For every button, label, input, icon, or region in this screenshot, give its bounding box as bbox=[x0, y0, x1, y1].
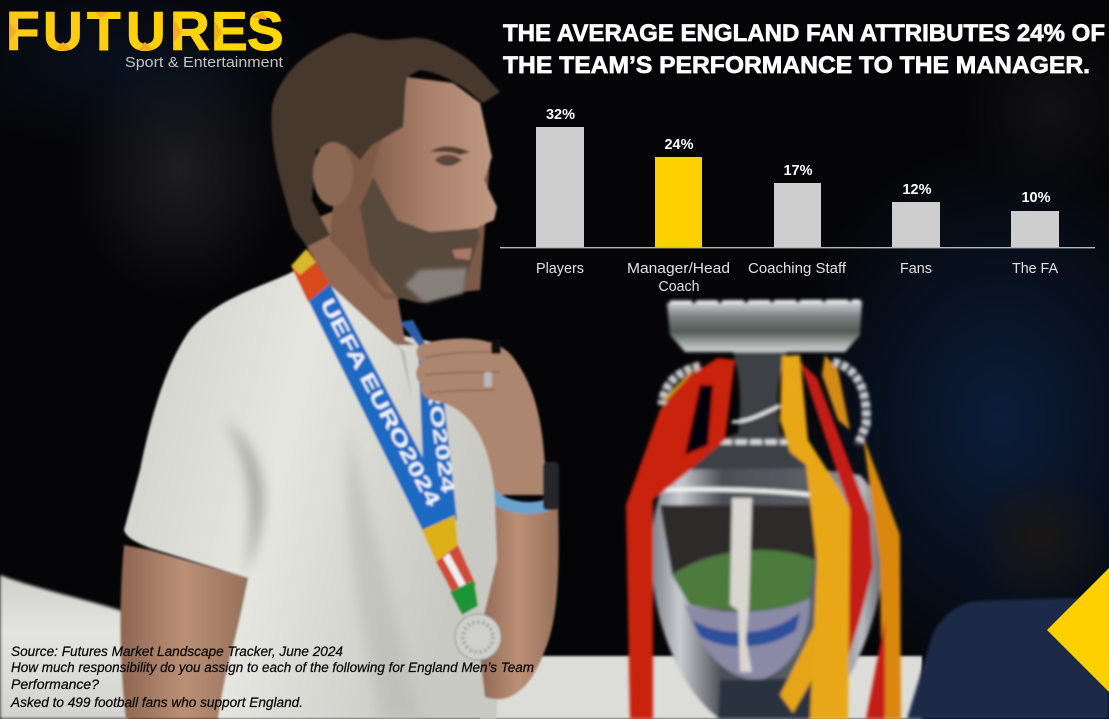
trophy reflection: pitch bbox=[672, 550, 815, 611]
bar: Fans: Fans bbox=[900, 261, 932, 277]
trophy neck bbox=[672, 352, 812, 470]
bar: Manager/Head Coach: 24% bbox=[664, 137, 694, 153]
ribbon white stripes bbox=[443, 553, 468, 590]
rings bbox=[484, 339, 501, 387]
source note: Performance? bbox=[11, 677, 100, 692]
ribbon: red lower bbox=[866, 620, 885, 719]
lips bbox=[452, 248, 472, 260]
fingers bbox=[425, 352, 500, 393]
logo facets bbox=[10, 12, 267, 50]
watch face bbox=[543, 462, 559, 510]
left arm bbox=[120, 545, 248, 719]
trophy body bbox=[652, 468, 885, 719]
trophy highlight bbox=[732, 406, 780, 422]
ribbon: black gap bbox=[685, 385, 713, 455]
collar bbox=[392, 340, 412, 400]
eye bbox=[435, 155, 462, 166]
ribbon: yellow main bbox=[780, 355, 850, 719]
ribbon green bbox=[450, 580, 478, 615]
logo subtitle: Sport & Entertainment bbox=[125, 55, 283, 71]
shirt fold bbox=[347, 430, 420, 719]
ribbon: orange upper right bbox=[822, 355, 850, 430]
logo: Futures Sport & Entertainment bbox=[6, 0, 284, 71]
photo: trophy with ribbons bbox=[626, 301, 901, 719]
ribbon: orange right bbox=[863, 436, 901, 719]
beard grey bbox=[405, 268, 467, 303]
ribbon: yellow tail bbox=[780, 625, 815, 713]
trophy base bbox=[718, 678, 813, 719]
trophy collar bbox=[690, 440, 800, 444]
bar: Players bbox=[536, 107, 584, 277]
bar: Coaching Staff bbox=[748, 163, 847, 277]
bar: The FA bbox=[1011, 190, 1059, 277]
icon: yellow diamond bbox=[1047, 568, 1109, 692]
trophy body top highlight bbox=[662, 489, 818, 496]
beard bbox=[360, 177, 480, 303]
medal bbox=[455, 614, 501, 660]
photo: manager bbox=[120, 33, 559, 719]
bar: Players: 32% bbox=[546, 107, 575, 123]
bar: The FA: The FA bbox=[1012, 261, 1058, 277]
main strap with text bbox=[308, 284, 456, 535]
face bbox=[360, 77, 497, 303]
inner lanyard strap bbox=[400, 320, 426, 345]
lanyard pattern yellow bbox=[291, 249, 316, 275]
ear bbox=[313, 142, 353, 206]
bar: Players: Players bbox=[536, 261, 584, 277]
trophy handles bbox=[662, 362, 866, 445]
bar: Coaching Staff: 17% bbox=[783, 163, 813, 179]
bar: The FA: 10% bbox=[1021, 190, 1051, 206]
eyebrow bbox=[430, 146, 470, 155]
ribbon yellow bbox=[422, 515, 458, 562]
shirt shadow bbox=[225, 420, 263, 575]
bar chart bbox=[500, 107, 1095, 295]
trophy rim highlights bbox=[670, 301, 860, 302]
ribbon: red centre bbox=[800, 362, 873, 660]
right forearm bbox=[478, 505, 559, 699]
source note bbox=[10, 644, 534, 710]
logo wordmark: FUTURES bbox=[6, 0, 284, 62]
ribbon: yellow left bbox=[660, 362, 700, 402]
ribbon stripes bbox=[436, 545, 476, 592]
bar: Manager/Head Coach bbox=[627, 137, 730, 295]
head base bbox=[330, 80, 490, 300]
hair bbox=[271, 33, 500, 247]
trophy reflection: stands bbox=[660, 505, 818, 575]
bar: Fans: 12% bbox=[902, 182, 932, 198]
trophy reflection: blue ring bbox=[692, 612, 800, 647]
shirt bbox=[124, 268, 497, 719]
source note: Asked to 499 football fans who support England. bbox=[10, 695, 303, 710]
bar: Coaching Staff: Coaching Staff bbox=[748, 261, 847, 277]
strap text: EURO2024 bbox=[416, 343, 458, 495]
title: THE TEAM’S PERFORMANCE TO THE MANAGER. bbox=[503, 52, 1090, 79]
trophy rim bbox=[667, 301, 862, 352]
strap text: UEFA EURO2024 bbox=[316, 295, 445, 511]
right strap with text bbox=[416, 343, 458, 532]
bar: Manager/Head Coach: Manager/Head bbox=[627, 261, 730, 277]
watch strap bbox=[494, 488, 552, 514]
bar: Manager/Head Coach: Coach bbox=[658, 279, 700, 295]
title bbox=[503, 20, 1105, 79]
hand and wrist bbox=[416, 339, 548, 495]
title: THE AVERAGE ENGLAND FAN ATTRIBUTES 24% OF bbox=[503, 20, 1105, 47]
trophy reflection: floor bbox=[685, 598, 810, 680]
lanyard pattern bbox=[292, 250, 330, 302]
source note: How much responsibility do you assign to each of the following for England Men’s Team bbox=[11, 660, 534, 675]
trophy reflection: figure bbox=[730, 498, 752, 672]
bar: Fans bbox=[892, 182, 940, 277]
ribbon: red left bbox=[626, 358, 735, 719]
photo: blue seat bbox=[907, 598, 1109, 719]
source note: Source: Futures Market Landscape Tracker, June 2024 bbox=[11, 644, 343, 659]
neck bbox=[300, 200, 415, 345]
